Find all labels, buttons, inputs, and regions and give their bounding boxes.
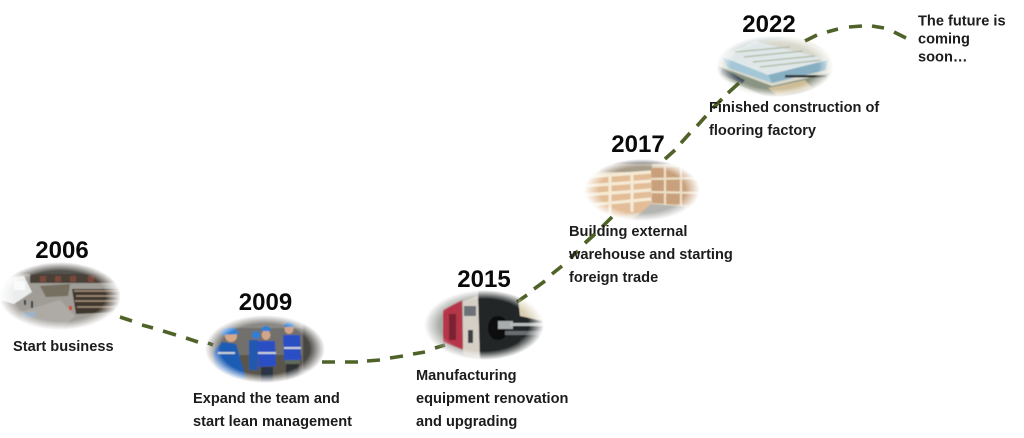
year: 2017: 2017: [611, 131, 665, 158]
milestone: 2006: [1, 241, 120, 351]
photo: workers in blue: [206, 316, 324, 382]
label: Manufacturing: Manufacturing: [416, 368, 517, 384]
worker 3: [257, 341, 276, 367]
label: future: soon…: [918, 50, 967, 66]
label: Expand the team: start lean management: [193, 414, 352, 430]
label: Finished construction: Finished construction of: [709, 100, 879, 116]
dash over text: [585, 234, 595, 243]
milestone: 2009: [193, 289, 352, 430]
label: Expand the team: Expand the team and: [193, 391, 340, 407]
label: future: coming: [918, 32, 970, 48]
label: Building warehouse: foreign trade: [569, 270, 658, 286]
dashes crossing the photo: [713, 83, 739, 108]
photo: machine: [426, 290, 544, 360]
label: Manufacturing: equipment renovation: [416, 391, 569, 407]
label: Building warehouse: warehouse and starting: [568, 247, 733, 263]
label: Building warehouse: Building external: [569, 224, 687, 240]
milestone: 2017: [568, 131, 733, 286]
label: Start business: Start business: [13, 339, 114, 355]
worker 4: [283, 335, 301, 360]
milestone: 2022: [709, 11, 879, 139]
photo: crates in warehouse: [586, 160, 699, 220]
label: future: The future is: [918, 14, 1006, 30]
label: Finished construction: flooring factory: [709, 123, 817, 139]
photo: flooring factory: [714, 36, 836, 98]
year: 2009: 2009: [239, 289, 292, 316]
worker 2: [249, 340, 258, 370]
worker 1: [213, 342, 246, 385]
year: 2022: 2022: [742, 11, 796, 38]
dashed timeline path: [120, 26, 906, 362]
milestone: 2015: [416, 266, 569, 430]
year: 2006: 2006: [35, 237, 89, 264]
label: Manufacturing: and upgrading: [416, 414, 517, 430]
photo: factory yard: [1, 262, 120, 330]
year: 2015: 2015: [457, 266, 511, 293]
